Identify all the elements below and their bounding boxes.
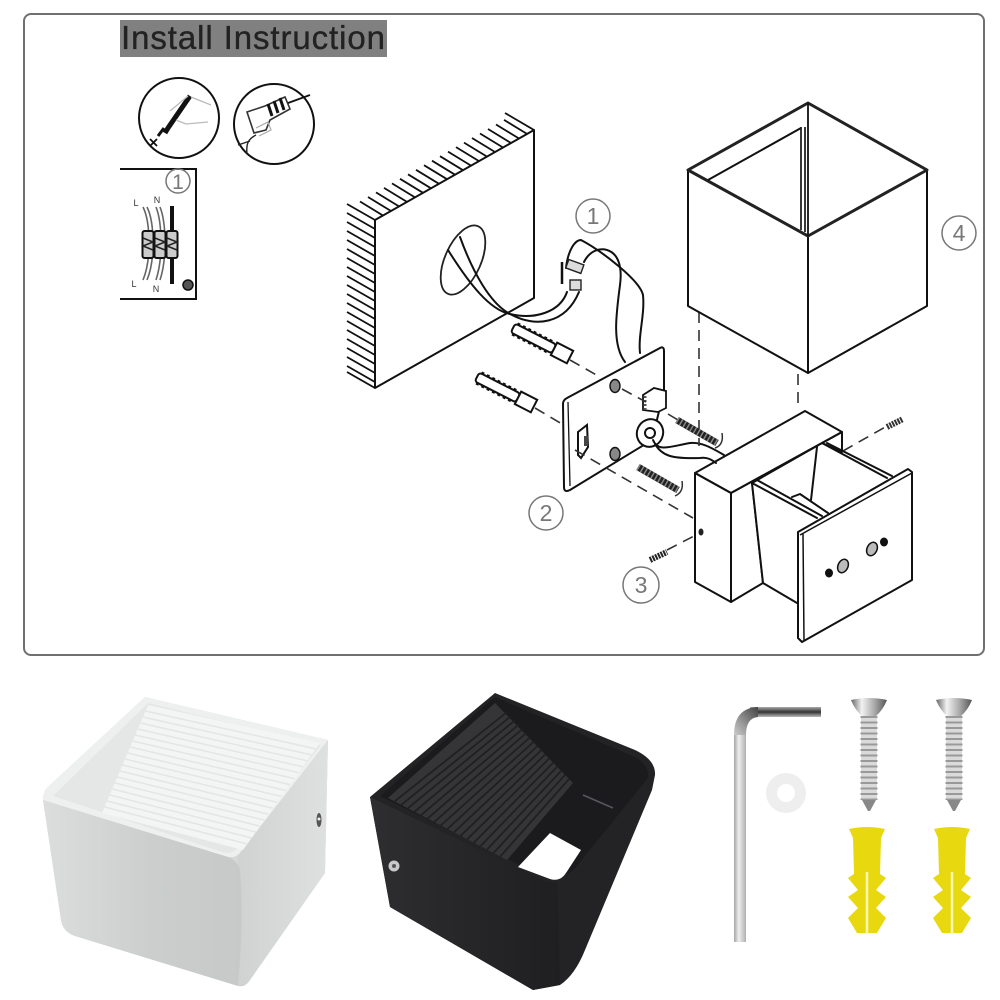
screw upper	[677, 420, 722, 448]
number 3	[623, 567, 659, 603]
wall anchor lower	[474, 371, 537, 412]
panel: wiring detail 1: L	[131, 279, 137, 289]
icon: marking the wall with a pencil	[139, 78, 219, 158]
number 2	[529, 496, 563, 530]
yellow anchor left	[848, 827, 886, 934]
lamp body with front plate	[695, 411, 912, 642]
plastic washer	[766, 773, 806, 813]
yellow anchor right	[933, 827, 971, 934]
photo: black lamp	[370, 693, 655, 990]
number 4	[942, 216, 976, 250]
lamp cover 4	[688, 103, 927, 373]
electrical wires and connector 1	[448, 237, 643, 362]
number 3: 3	[635, 572, 647, 598]
silver screw left	[851, 698, 887, 811]
number 4: 4	[953, 220, 966, 246]
set screw right	[887, 419, 903, 427]
number 1	[576, 199, 610, 233]
silver screw right	[936, 698, 972, 811]
icon: drilling the wall	[234, 84, 314, 164]
panel: wiring detail 1: 1	[172, 171, 184, 194]
photo: white lamp	[43, 697, 328, 986]
number 1: 1	[587, 203, 599, 229]
screw lower	[638, 467, 682, 496]
panel: wiring detail 1	[120, 169, 196, 299]
set screw left	[650, 552, 667, 560]
wall anchor upper	[510, 322, 573, 363]
panel: installation diagram	[24, 14, 984, 655]
hex key	[734, 707, 821, 942]
mounting plate	[563, 347, 724, 491]
panel: wiring detail 1: N	[154, 195, 160, 205]
heading: Install Instruction: Install Instruction	[121, 19, 385, 56]
wall with mounting hole	[347, 113, 534, 388]
panel: wiring detail 1: N	[153, 284, 159, 294]
dashed assembly guides	[535, 312, 887, 550]
panel: wiring detail 1: L	[133, 198, 139, 208]
number 2: 2	[540, 500, 552, 526]
